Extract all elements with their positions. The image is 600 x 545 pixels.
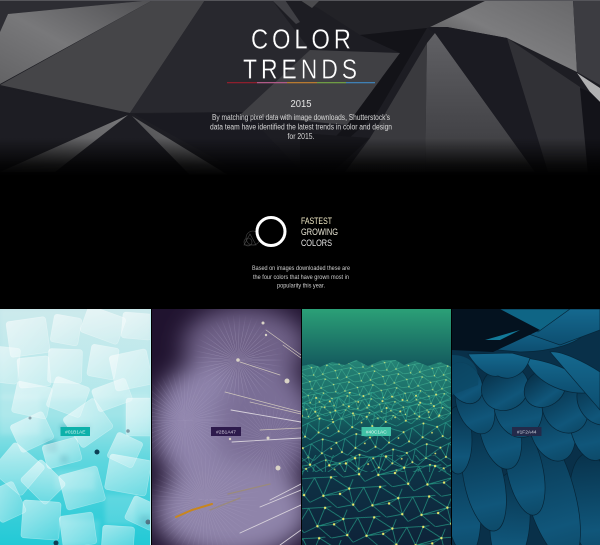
intro text: data team have identified the latest trends in color and design <box>210 122 392 132</box>
color label: turquoise <box>60 427 90 436</box>
hero: dark polygon background <box>0 0 600 180</box>
intro text: for 2015. <box>288 132 314 141</box>
color label: turquoise: #01B1AE <box>65 430 85 436</box>
panel: green network mesh <box>301 309 452 545</box>
title: TRENDS <box>243 54 361 85</box>
color label: dark navy <box>512 427 542 436</box>
year: 2015 <box>290 99 312 110</box>
intro text: By matching pixel data with image downloads, Shutterstock's <box>212 113 390 122</box>
panel: dandelion seeds <box>151 307 315 545</box>
heading: fastest growing colors: GROWING <box>301 227 338 237</box>
color label: mint green <box>362 427 391 436</box>
description text <box>252 265 350 290</box>
icon: ring with overlapping circles <box>244 218 285 246</box>
description text: Based on images downloaded these are <box>252 265 350 272</box>
heading: fastest growing colors: FASTEST <box>301 216 332 226</box>
description text: the four colors that have grown most in <box>253 274 349 281</box>
title <box>243 23 361 85</box>
heading: fastest growing colors <box>301 216 338 248</box>
color label: deep purple <box>211 427 241 436</box>
title: COLOR <box>251 23 355 55</box>
panel: ice cubes <box>0 305 162 545</box>
color label: mint green: #40C1AC <box>366 430 387 436</box>
color label: dark navy: #1F2A44 <box>517 430 537 436</box>
panel: blue feathers <box>438 309 600 545</box>
heading: fastest growing colors: COLORS <box>301 238 332 248</box>
intro text <box>210 113 392 141</box>
rainbow underline <box>227 82 375 83</box>
description text: popularity this year. <box>277 282 325 290</box>
color label: deep purple: #2B1A47 <box>216 430 236 436</box>
